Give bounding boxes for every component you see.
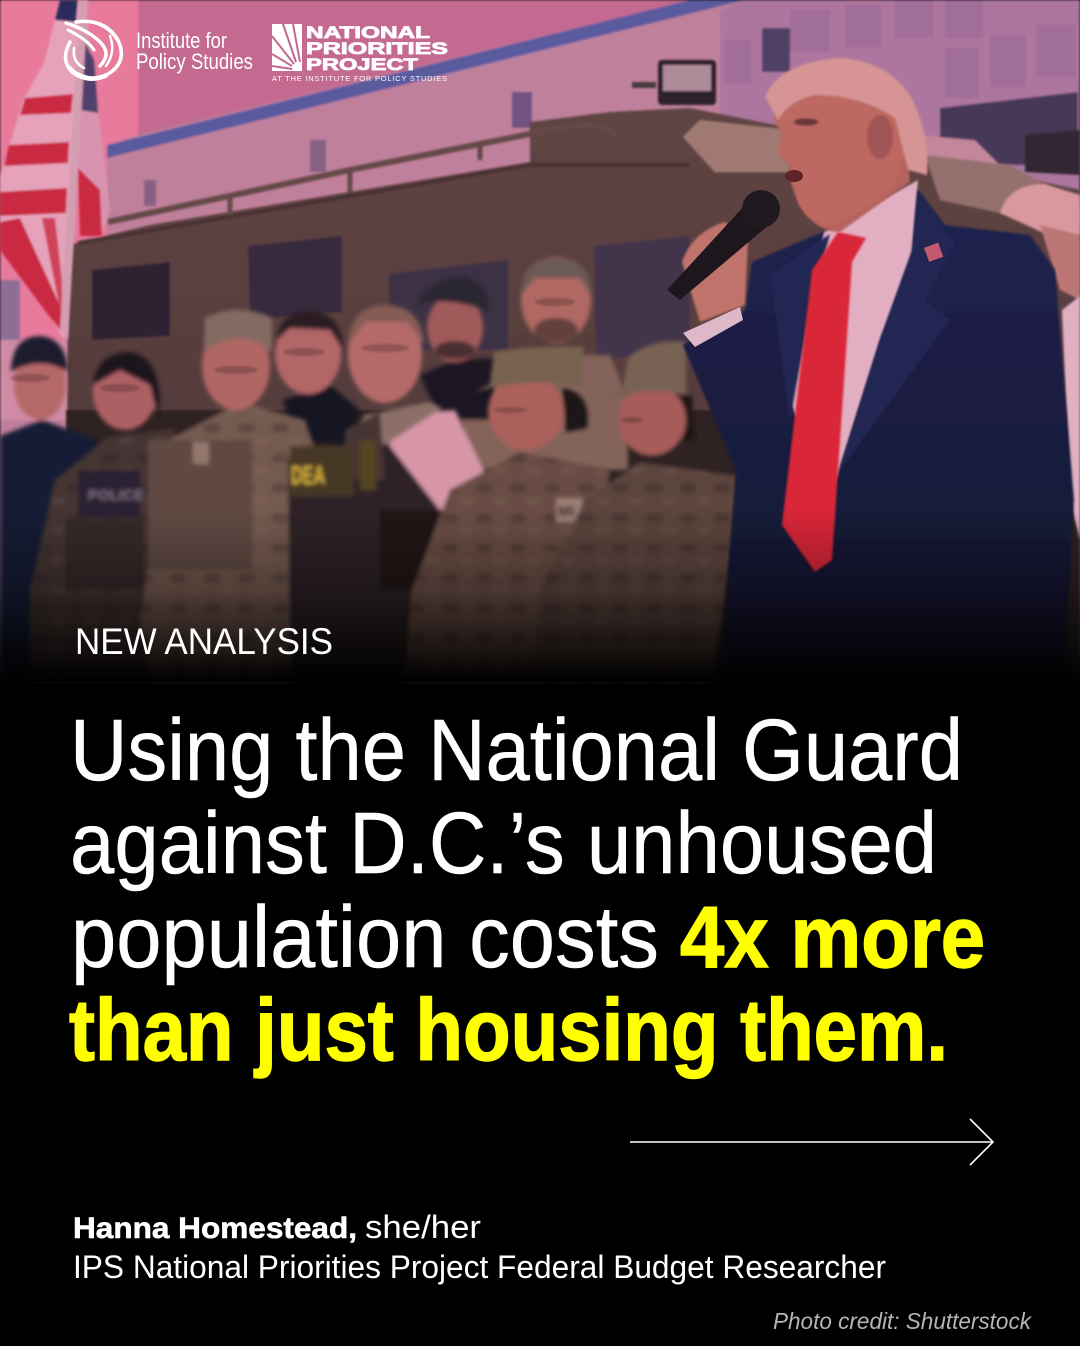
suit — [683, 190, 1074, 680]
icon: sunburst — [272, 24, 302, 71]
female soldier 2 — [530, 341, 738, 680]
headline — [69, 702, 985, 1079]
ear — [867, 115, 893, 159]
right lapel — [830, 190, 955, 500]
logo: National Priorities Project — [272, 23, 448, 83]
shirt cuff — [683, 307, 743, 347]
soldier with patrol cap — [140, 310, 322, 680]
eye — [794, 118, 818, 126]
DEA agent: DEA — [291, 460, 325, 490]
female soldier 1: MI — [558, 503, 575, 520]
byline: she/her — [365, 1209, 481, 1245]
photo: background agents — [0, 257, 628, 680]
bearded agent — [458, 257, 628, 470]
byline: IPS National Priorities Project Federal Budget Researcher — [73, 1249, 886, 1285]
dark haired agent — [275, 311, 360, 445]
photo: fade to black — [0, 510, 1080, 682]
logo text — [136, 28, 253, 74]
photo: Trump speaking before National Guard and federal agents — [0, 0, 1080, 682]
logo: Institute for Policy Studies — [65, 21, 253, 79]
flag pin — [924, 243, 943, 262]
left lapel — [770, 234, 830, 420]
logo wordmark: PRIORITIES — [306, 39, 448, 58]
headline highlight — [69, 889, 985, 1079]
face — [773, 88, 905, 226]
photo credit: Photo credit: Shutterstock — [773, 1308, 1032, 1334]
police agent: POLICE — [88, 487, 144, 504]
logo wordmark: PROJECT — [306, 55, 419, 74]
photo background: building — [0, 0, 1080, 680]
logo wordmark: NATIONAL — [306, 23, 430, 42]
logo text: Policy Studies — [136, 49, 253, 74]
byline — [73, 1209, 886, 1285]
left agent — [0, 336, 97, 680]
photo: Trump figure — [667, 58, 1080, 680]
cap agent — [416, 277, 496, 420]
photo: flag — [0, 0, 110, 340]
photo: face details — [10, 298, 644, 423]
female soldier 1 — [405, 347, 610, 680]
hair — [765, 58, 928, 175]
logo text: Institute for — [136, 28, 227, 53]
neck and jaw — [797, 130, 910, 232]
photo: soldiers and agents in front — [30, 305, 738, 680]
hand — [682, 222, 748, 322]
mouth — [785, 170, 803, 182]
byline: Hanna Homestead, — [73, 1212, 357, 1245]
DEA agent — [288, 305, 486, 680]
tie — [782, 232, 866, 572]
headline: against D.C.’s unhoused — [70, 795, 937, 892]
headline: Using the National Guard — [70, 702, 963, 799]
label: new analysis: NEW ANALYSIS — [75, 621, 333, 662]
right person — [1000, 184, 1080, 540]
headline highlight: than just housing them. — [69, 982, 948, 1079]
shirt — [790, 180, 918, 505]
logo: National Priorities Project: AT THE INSTITUTE FOR POLICY STUDIES — [272, 74, 447, 83]
arrow — [630, 1119, 993, 1165]
photo: armoured vehicle — [66, 60, 1080, 680]
icon: IPS swirl — [65, 21, 121, 79]
headline highlight: 4x more — [680, 889, 985, 986]
headline: population costs — [71, 889, 659, 986]
microphone — [667, 190, 780, 300]
logo wordmark — [306, 23, 448, 74]
police agent — [30, 352, 175, 680]
